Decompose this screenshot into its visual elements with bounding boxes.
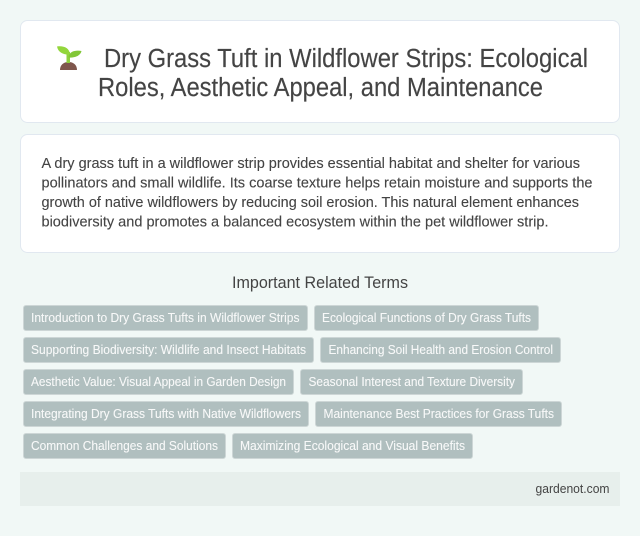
tag (24, 338, 314, 362)
icon: seedling (57, 46, 82, 70)
tag: Ecological Functions of Dry Grass Tufts (322, 311, 531, 325)
tag: Enhancing Soil Health and Erosion Control (328, 343, 553, 357)
title (98, 45, 588, 102)
tag: Integrating Dry Grass Tufts with Native Wildflowers (31, 407, 301, 421)
tag (316, 402, 562, 426)
footer source text: gardenot.com (536, 481, 610, 496)
tag (24, 434, 226, 458)
tag: Supporting Biodiversity: Wildlife and Insect Habitats (31, 343, 306, 357)
tag (232, 434, 472, 458)
tag (24, 402, 308, 426)
tag (300, 370, 522, 394)
title: Roles, Aesthetic Appeal, and Maintenance (98, 74, 543, 102)
text block: description paragraph: growth of native wildflowers by reducing soil erosion. This natural element enhances (42, 195, 579, 211)
text block: description paragraph: A dry grass tuft in a wildflower strip provides essential habitat and shelter for various (42, 156, 580, 172)
panel: description (20, 134, 620, 252)
tag: Maintenance Best Practices for Grass Tufts (324, 407, 554, 421)
panel: title card (20, 20, 620, 122)
tag: Common Challenges and Solutions (31, 439, 218, 453)
text block: description paragraph: biodiversity and promotes a balanced ecosystem within the pet wildflower strip. (42, 214, 548, 230)
title: Dry Grass Tuft in Wildflower Strips: Ecological (104, 45, 588, 73)
tag (24, 370, 294, 394)
tag (314, 306, 538, 330)
tag: Seasonal Interest and Texture Diversity (308, 375, 516, 389)
text block: description paragraph: pollinators and small wildlife. Its coarse texture helps retain moisture and supports the (42, 176, 592, 192)
tag list: related terms (24, 306, 562, 458)
tag: Introduction to Dry Grass Tufts in Wildflower Strips (31, 311, 300, 325)
text block: description paragraph (42, 156, 592, 230)
tag (320, 338, 560, 362)
tag: Maximizing Ecological and Visual Benefits (240, 439, 465, 453)
tag (24, 306, 308, 330)
heading: important related terms: Important Related Terms (232, 274, 408, 292)
footer (20, 472, 620, 506)
tag: Aesthetic Value: Visual Appeal in Garden Design (31, 375, 286, 389)
